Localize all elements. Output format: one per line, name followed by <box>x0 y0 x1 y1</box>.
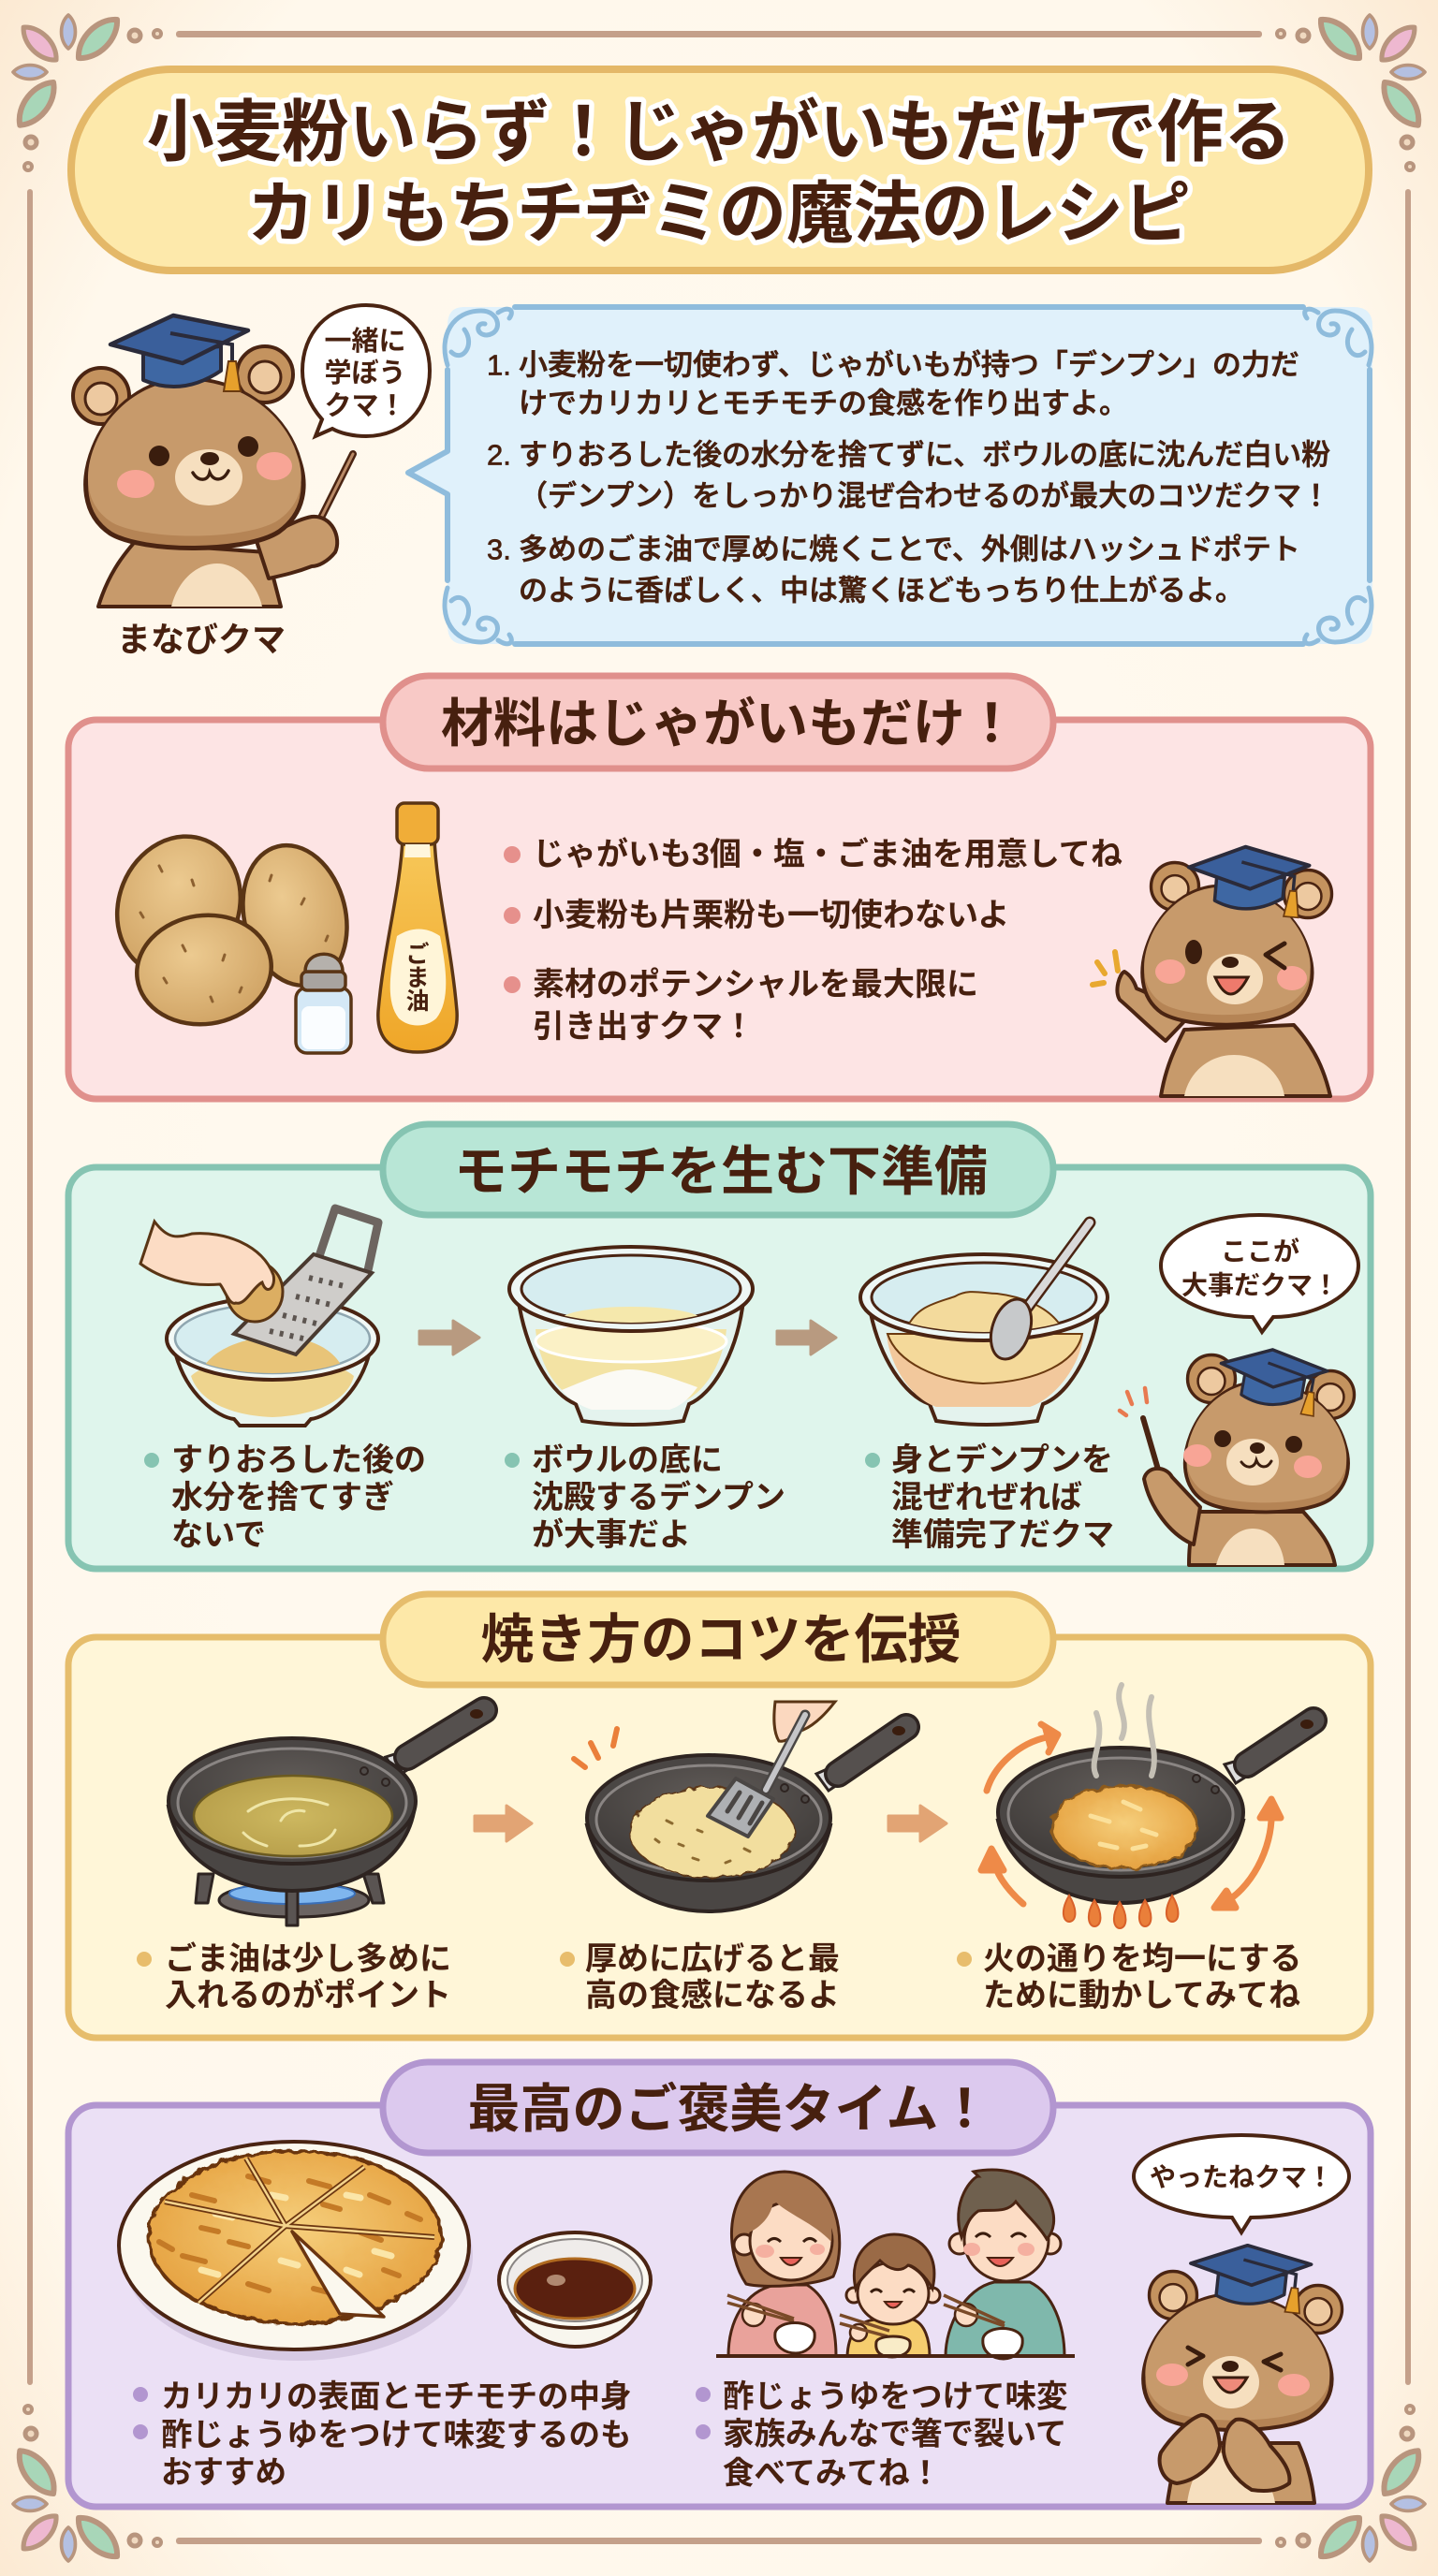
panel: preparation <box>68 1124 1371 1569</box>
prep text columns: ないで <box>171 1517 266 1553</box>
points text: けでカリカリとモチモチの食感を作り出すよ。 <box>519 388 1128 419</box>
icon: pan spreading batter <box>574 1702 906 1911</box>
reward text left: 酢じょうゆをつけて味変するのも <box>161 2419 631 2452</box>
points text: のように香ばしく、中は驚くほどもっちり仕上がるよ。 <box>519 575 1244 607</box>
icon: pan with oil on burner <box>169 1709 484 1925</box>
father <box>946 2170 1064 2356</box>
rotation arrows <box>981 1724 1281 1908</box>
icon: sesame oil bottle: ご <box>405 941 430 968</box>
reward text right: 食べてみてね！ <box>723 2456 941 2492</box>
panel: frying tips <box>68 1594 1371 2038</box>
frying text columns <box>137 1941 1301 2013</box>
icon: potatoes <box>96 818 361 1032</box>
mascot: happy bear <box>1143 2240 1343 2503</box>
arrow <box>475 1806 532 1841</box>
hands <box>1160 2415 1220 2483</box>
mascot: bear with pointer <box>1120 1341 1354 1565</box>
browned texture <box>159 2176 420 2293</box>
icon: salt shaker <box>296 954 351 1053</box>
mascot name: まなびクマ <box>117 620 286 659</box>
reward text right: 家族みんなで箸で裂いて <box>723 2417 1067 2452</box>
speech bubble: learn together: クマ！ <box>324 391 406 421</box>
prep text columns: 水分を捨てすぎ <box>171 1480 394 1515</box>
icon: sesame oil bottle <box>378 803 457 1052</box>
reward text right <box>696 2379 1067 2492</box>
heading: reward time <box>383 2062 1053 2153</box>
speech bubble: learn together <box>302 305 430 436</box>
panel: ingredients <box>68 676 1371 1099</box>
potato <box>227 1262 283 1322</box>
speech bubble: well done <box>1134 2135 1349 2232</box>
icon: plate of chijimi <box>119 2142 473 2361</box>
mascot: manabi bear <box>73 315 353 607</box>
ingredient bullets: 小麦粉も片栗粉も一切使わないよ <box>533 898 1009 933</box>
heading: preparation: モチモチを生む下準備 <box>454 1142 988 1202</box>
prep text columns: 混ぜれぜれば <box>891 1480 1082 1515</box>
heading: ingredients: 材料はじゃがいもだけ！ <box>441 695 1018 753</box>
steam <box>1094 1685 1154 1776</box>
points text: すりおろした後の水分を捨てずに、ボウルの底に沈んだ白い粉 <box>519 438 1330 472</box>
prep text columns: ボウルの底に <box>532 1442 723 1478</box>
pancake base <box>149 2151 441 2323</box>
reward text left: おすすめ <box>161 2456 286 2490</box>
ingredient bullets <box>504 836 1123 1045</box>
ingredient bullets: じゃがいも3個・塩・ごま油を用意してね <box>533 836 1123 872</box>
reward text right: 酢じょうゆをつけて味変 <box>723 2379 1067 2415</box>
prep text columns: すりおろした後の <box>171 1442 426 1478</box>
frying text columns: 火の通りを均一にする <box>983 1941 1301 1977</box>
frying text columns: ために動かしてみてね <box>983 1978 1300 2013</box>
points text: 3. <box>487 534 511 565</box>
heading: frying tips <box>383 1594 1053 1685</box>
heading: preparation <box>383 1124 1053 1215</box>
arrow <box>419 1321 479 1354</box>
speech bubble: well done: やったねクマ！ <box>1150 2162 1333 2192</box>
title banner <box>71 69 1369 271</box>
icon: pan with crisp pancake <box>981 1685 1313 1928</box>
speech bubble: important: ここが <box>1221 1236 1299 1266</box>
ingredient bullets: 引き出すクマ！ <box>533 1009 755 1045</box>
child <box>846 2234 940 2356</box>
reward text left <box>133 2379 631 2490</box>
title banner: 小麦粉いらず！じゃがいもだけで作る <box>147 95 1291 170</box>
speech bubble: important <box>1161 1215 1358 1332</box>
points text: 多めのごま油で厚めに焼くことで、外側はハッシュドポテト <box>519 534 1300 565</box>
icon: bowl mixed with spoon <box>860 1222 1108 1425</box>
prep text columns: が大事だよ <box>532 1516 691 1553</box>
speech bubble: learn together: 一緒に <box>324 326 406 357</box>
panel: summary points <box>408 307 1372 644</box>
frying text columns: 高の食感になるよ <box>585 1978 840 2013</box>
speech bubble: learn together: 学ぼう <box>324 358 406 388</box>
icon: grating potato over bowl <box>140 1208 378 1426</box>
frying text columns: 入れるのがポイント <box>165 1977 451 2013</box>
prep text columns <box>144 1442 1114 1553</box>
icon: sesame oil bottle: 油 <box>405 988 430 1015</box>
panel: reward time <box>68 2062 1371 2507</box>
points text: 1. <box>487 348 511 382</box>
flames <box>1064 1895 1178 1928</box>
arrow <box>888 1806 946 1841</box>
mascot: winking bear <box>1093 842 1331 1096</box>
frying text columns: 厚めに広げると最 <box>585 1941 840 1977</box>
mother <box>728 2172 840 2356</box>
speech bubble: important: 大事だクマ！ <box>1181 1271 1339 1299</box>
reward text left: カリカリの表面とモチモチの中身 <box>161 2379 631 2415</box>
grater <box>234 1208 378 1354</box>
points text: 小麦粉を一切使わず、じゃがいもが持つ「デンプン」の力だ <box>519 348 1299 382</box>
icon: bowl with starch <box>509 1247 753 1425</box>
cuts <box>165 2159 434 2303</box>
icon: dipping sauce <box>499 2232 651 2347</box>
heading: ingredients <box>383 676 1053 768</box>
arrow <box>777 1321 836 1354</box>
chopsticks and rice bowls <box>727 2295 1022 2359</box>
prep text columns: 身とデンプンを <box>891 1442 1113 1478</box>
prep text columns: 準備完了だクマ <box>891 1517 1114 1553</box>
points text: （デンプン）をしっかり混ぜ合わせるのが最大のコツだクマ！ <box>519 479 1330 513</box>
prep text columns: 沈殿するデンプン <box>532 1479 785 1515</box>
spatula and hand <box>774 1702 835 1741</box>
title banner: カリもちチヂミの魔法のレシピ <box>247 177 1191 252</box>
frying text columns: ごま油は少し多めに <box>165 1941 451 1977</box>
heading: reward time: 最高のご褒美タイム！ <box>468 2080 990 2138</box>
slice gap <box>292 2232 384 2317</box>
points text <box>487 348 1330 607</box>
points text: 2. <box>487 438 511 472</box>
ingredient bullets: 素材のポテンシャルを最大限に <box>533 967 978 1003</box>
icon: family eating <box>716 2170 1075 2359</box>
icon: sesame oil bottle: ま <box>405 965 430 991</box>
heading: frying tips: 焼き方のコツを伝授 <box>481 1610 961 1670</box>
hand <box>140 1222 274 1303</box>
